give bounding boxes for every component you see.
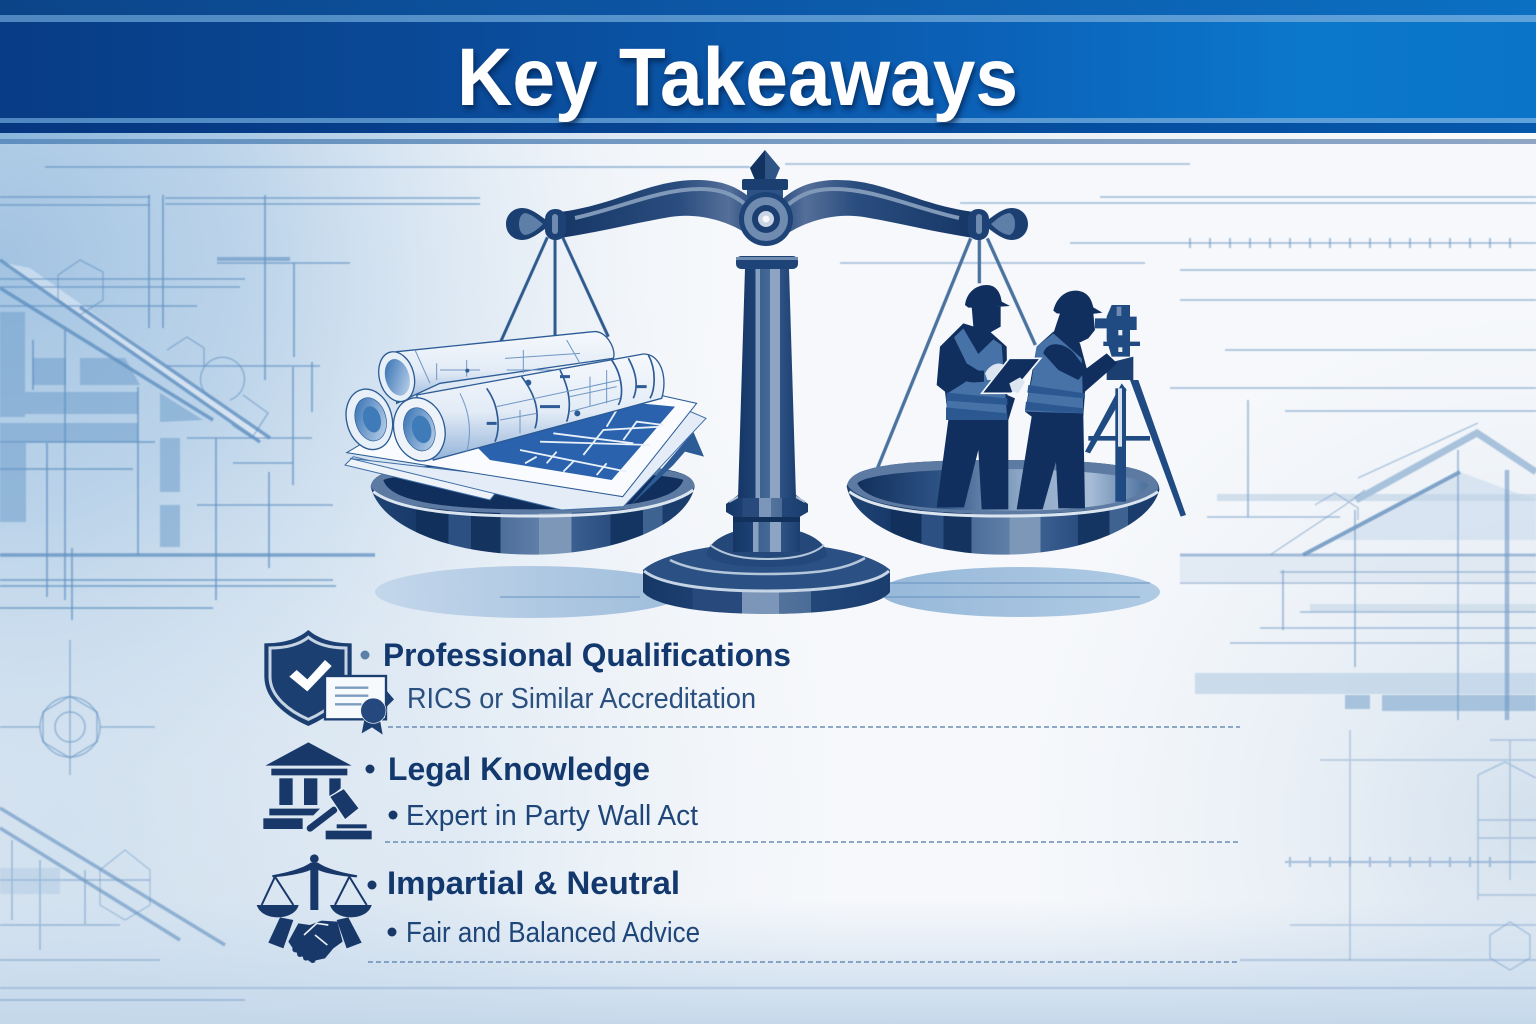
- bullet: [388, 810, 398, 820]
- surveyor two: [1017, 291, 1117, 509]
- right hanging cords: [868, 238, 1035, 491]
- surveyors with total station: [937, 285, 1186, 517]
- tablet and hands: [982, 358, 1041, 393]
- item: professional qualifications: [264, 630, 791, 735]
- right beam end knob: [968, 208, 1028, 240]
- left beam end knob: [506, 208, 566, 240]
- bullet: [368, 880, 376, 890]
- central column and base: [643, 256, 890, 614]
- icon: courthouse and gavel: [263, 742, 372, 839]
- left hanging cords: [501, 237, 608, 342]
- bullet: [366, 764, 374, 774]
- stacked sheets: [345, 383, 706, 510]
- tripod and instrument: [1085, 305, 1186, 517]
- bullet: [360, 650, 370, 660]
- item: impartial and neutral: [257, 854, 700, 963]
- icon: shield with certificate: [264, 630, 394, 735]
- heading: Legal Knowledge: [388, 751, 650, 787]
- bullet: [388, 928, 396, 936]
- detail text: Expert in Party Wall Act: [406, 800, 698, 832]
- header banner: [0, 0, 1536, 144]
- blueprint sheets and rolls: [340, 332, 706, 510]
- finial and hub: [739, 150, 793, 246]
- icon: scales and handshake: [257, 854, 372, 963]
- detail text: RICS or Similar Accreditation: [407, 683, 756, 715]
- detail text: Fair and Balanced Advice: [406, 917, 700, 949]
- heading: Professional Qualifications: [383, 637, 791, 673]
- balance scale: [340, 150, 1186, 614]
- right pan: [847, 460, 1159, 555]
- left pan: [371, 463, 695, 555]
- title: Key Takeaways: [457, 32, 1018, 123]
- blueprint drawing: left side: [0, 167, 750, 1000]
- roll: left: [340, 384, 399, 455]
- surveyor one: [937, 285, 1015, 509]
- roll: front: [387, 354, 664, 467]
- roll: back: [373, 332, 614, 406]
- item: legal knowledge: [263, 742, 698, 839]
- ground shadows under scale: [375, 566, 1160, 618]
- beam: [560, 180, 974, 242]
- heading: Impartial & Neutral: [387, 865, 680, 901]
